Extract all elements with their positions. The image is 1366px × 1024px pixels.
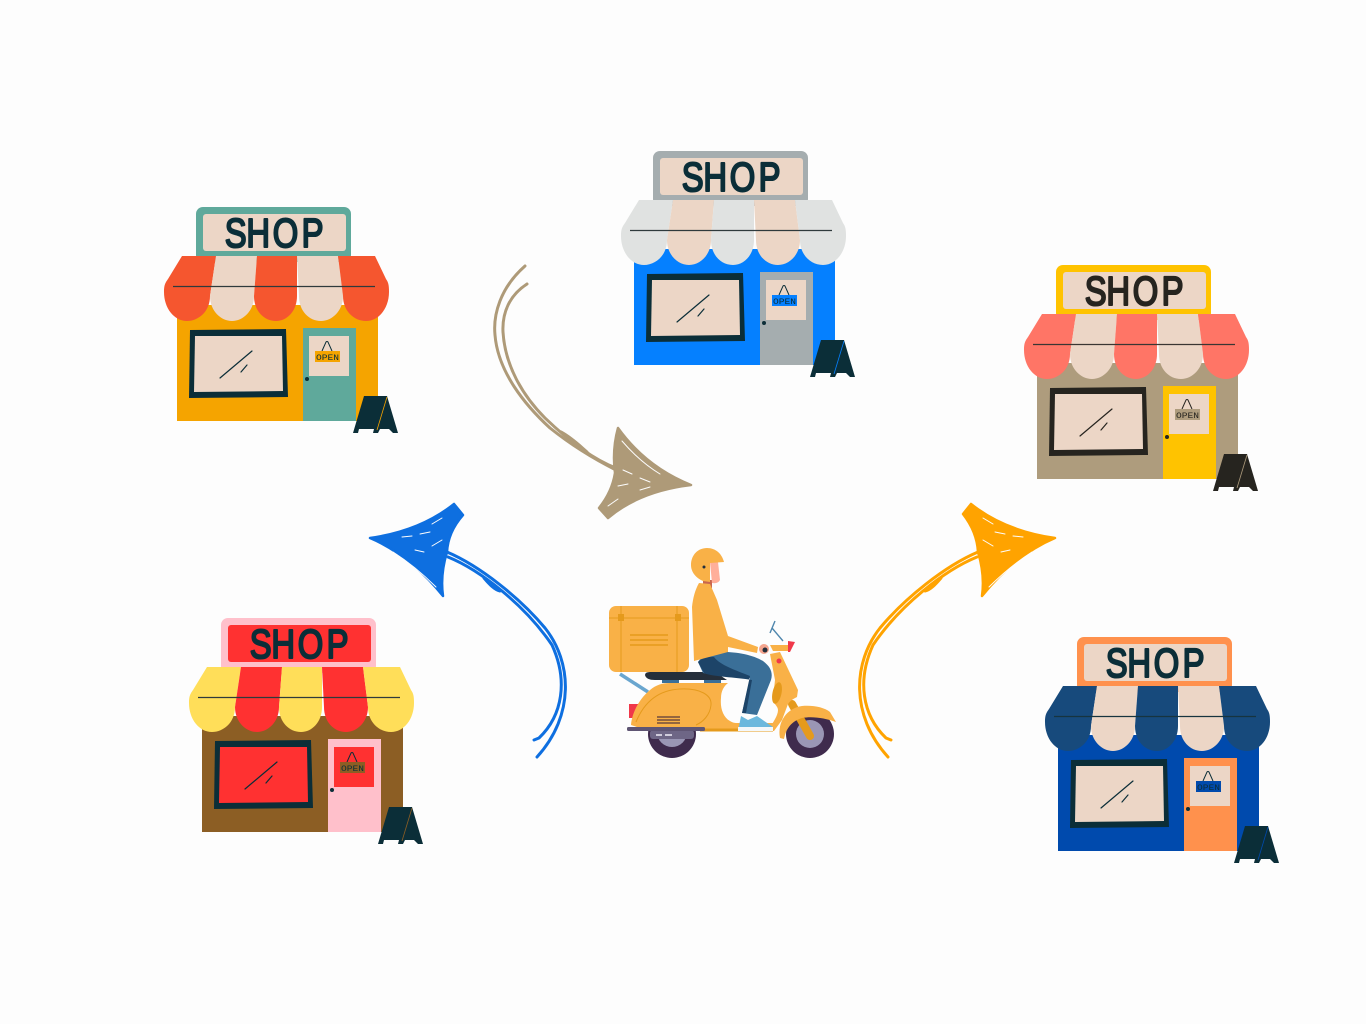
- shop: orange with teal sign: [164, 207, 398, 433]
- window: [1070, 759, 1169, 828]
- helmet: [691, 548, 724, 582]
- sandwich board: [1234, 826, 1279, 863]
- delivery rider on scooter: [609, 548, 836, 758]
- shop sign: SHOP: [225, 209, 323, 256]
- front wheel: [786, 704, 834, 758]
- awning: [1045, 686, 1270, 751]
- arrow: tan, from top shops to scooter destination: [495, 266, 691, 518]
- shop sign: SHOP: [1085, 267, 1183, 314]
- delivery box: [609, 606, 689, 672]
- window: [189, 329, 288, 398]
- front fender: [779, 706, 836, 739]
- mirror: [770, 621, 783, 641]
- shop sign: SHOP: [682, 153, 780, 200]
- door: [1184, 758, 1237, 851]
- tail light: [629, 704, 638, 718]
- rider legs: [698, 652, 772, 715]
- shop: tan with yellow sign: [1024, 265, 1258, 491]
- shop: brown with red sign: [189, 618, 423, 844]
- shop sign: SHOP: [1106, 639, 1204, 686]
- shop: navy with orange sign: [1045, 637, 1279, 863]
- door: [328, 739, 381, 832]
- rear wheel: [648, 710, 696, 758]
- door: [1163, 386, 1216, 479]
- rider jacket: [692, 583, 758, 661]
- shop building: [1037, 363, 1238, 479]
- shop building: [634, 249, 835, 365]
- door: [303, 328, 356, 421]
- shop building: [177, 305, 378, 421]
- arrow: orange, curving up to the right: [860, 504, 1055, 757]
- window: [214, 740, 313, 809]
- awning: [189, 667, 414, 732]
- arrow: blue, curving up to the left: [370, 504, 565, 757]
- sandwich board: [1213, 454, 1258, 491]
- shop sign: SHOP: [250, 620, 348, 667]
- shop building: [202, 716, 403, 832]
- door: OPEN: [1197, 784, 1220, 793]
- sandwich board: [810, 340, 855, 377]
- rider neck: [703, 580, 712, 588]
- shop sign: [653, 151, 808, 206]
- hand and handlebar: [759, 641, 795, 654]
- door: OPEN: [1176, 412, 1199, 421]
- rider face: [710, 562, 720, 583]
- window: [646, 273, 745, 342]
- awning: [1024, 314, 1249, 379]
- exhaust bar: [627, 727, 705, 731]
- luggage rack arm: [620, 674, 648, 692]
- door: OPEN: [341, 765, 364, 774]
- door: OPEN: [773, 298, 796, 307]
- door: [760, 272, 813, 365]
- shop sign: [196, 207, 351, 262]
- rider shoe: [738, 716, 773, 731]
- shop sign: [1077, 637, 1232, 692]
- awning: [621, 200, 846, 265]
- seat: [645, 672, 727, 683]
- shop sign: [221, 618, 376, 673]
- shop: blue with grey sign: [621, 151, 855, 377]
- window: [1049, 387, 1148, 456]
- door: OPEN: [316, 354, 339, 363]
- shop sign: [1056, 265, 1211, 320]
- sandwich board: [378, 807, 423, 844]
- scooter body: [631, 652, 798, 731]
- shop building: [1058, 735, 1259, 851]
- awning: [164, 256, 389, 321]
- sandwich board: [353, 396, 398, 433]
